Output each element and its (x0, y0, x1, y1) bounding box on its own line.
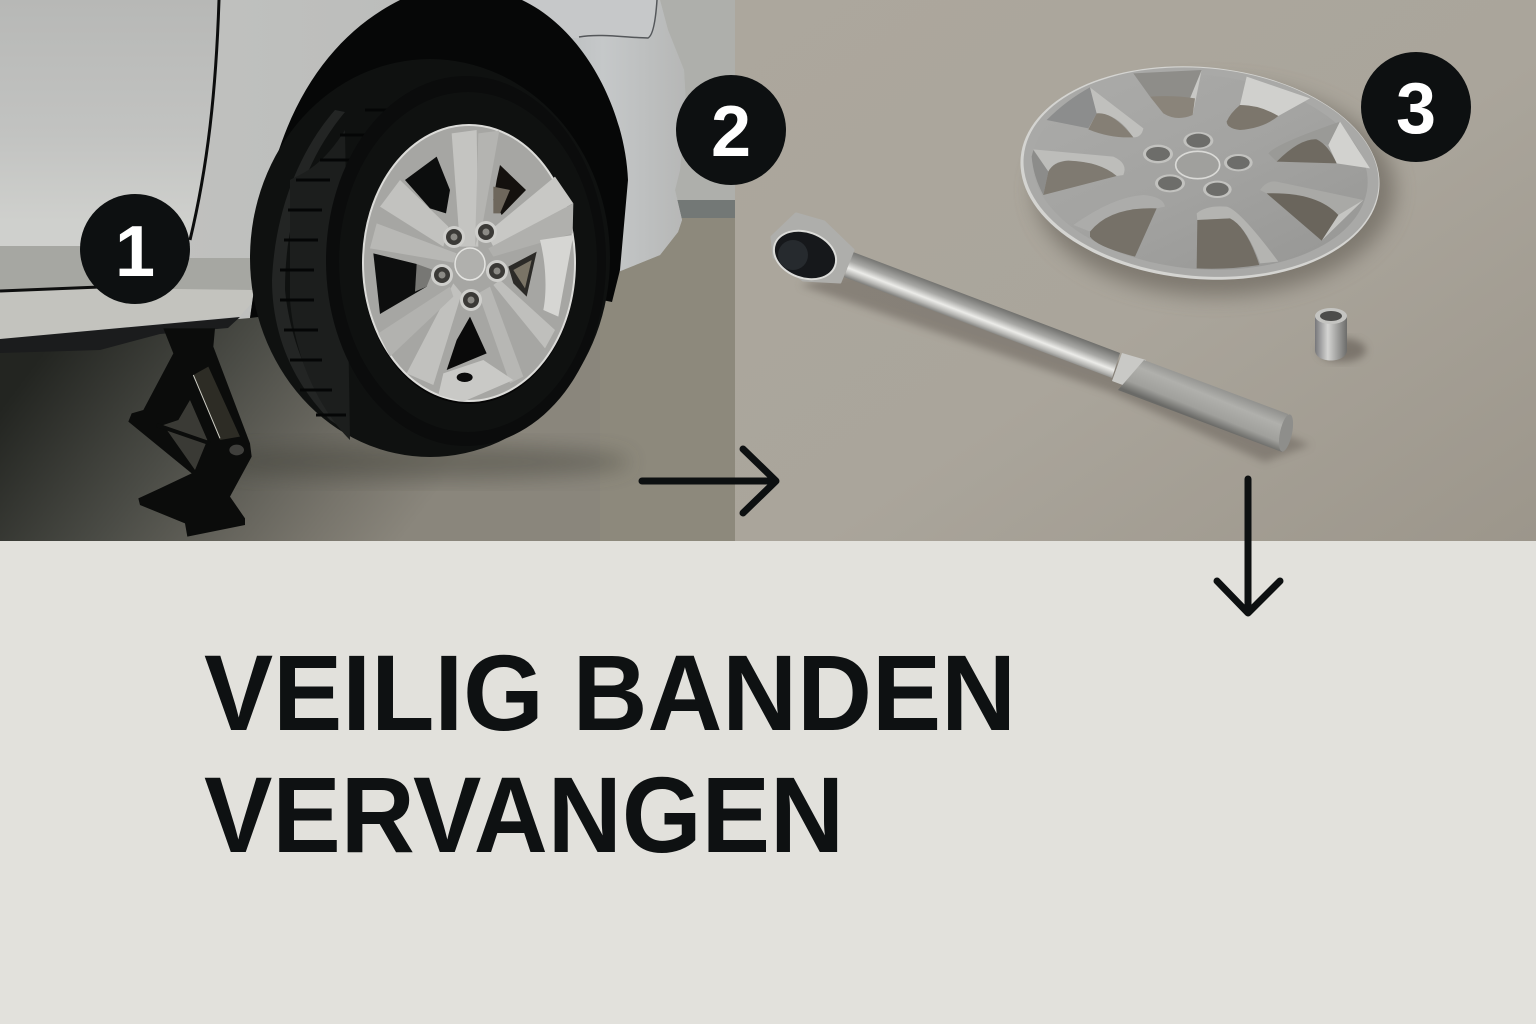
step badge 3: 3 (1396, 69, 1436, 149)
wheel arch (250, 0, 628, 318)
car body (0, 0, 686, 353)
step badge 3 (1361, 52, 1471, 162)
socket (1315, 308, 1366, 362)
step badge 1: 1 (115, 212, 155, 292)
step badge 2: 2 (711, 92, 751, 172)
rim openings (370, 130, 573, 402)
title: VERVANGEN (204, 754, 844, 875)
arrow: down (1217, 479, 1280, 613)
spokes (452, 130, 478, 247)
torque wrench (766, 214, 1310, 462)
panel: tools on concrete photo (735, 0, 1536, 541)
stud recesses (1183, 132, 1213, 149)
hubcap openings (1133, 70, 1202, 98)
step badge 1 (80, 194, 190, 304)
alloy rim (362, 124, 576, 404)
hub cap (455, 248, 485, 280)
scissor jack (128, 328, 252, 537)
title: VEILIG BANDEN (204, 632, 1016, 753)
lug nuts (431, 221, 508, 311)
hubcap (1011, 52, 1395, 296)
tire (250, 59, 610, 457)
arrow: right (642, 449, 776, 513)
step badge 2 (676, 75, 786, 185)
panel: car with jack and wheel photo (0, 0, 735, 541)
title (204, 632, 1016, 875)
